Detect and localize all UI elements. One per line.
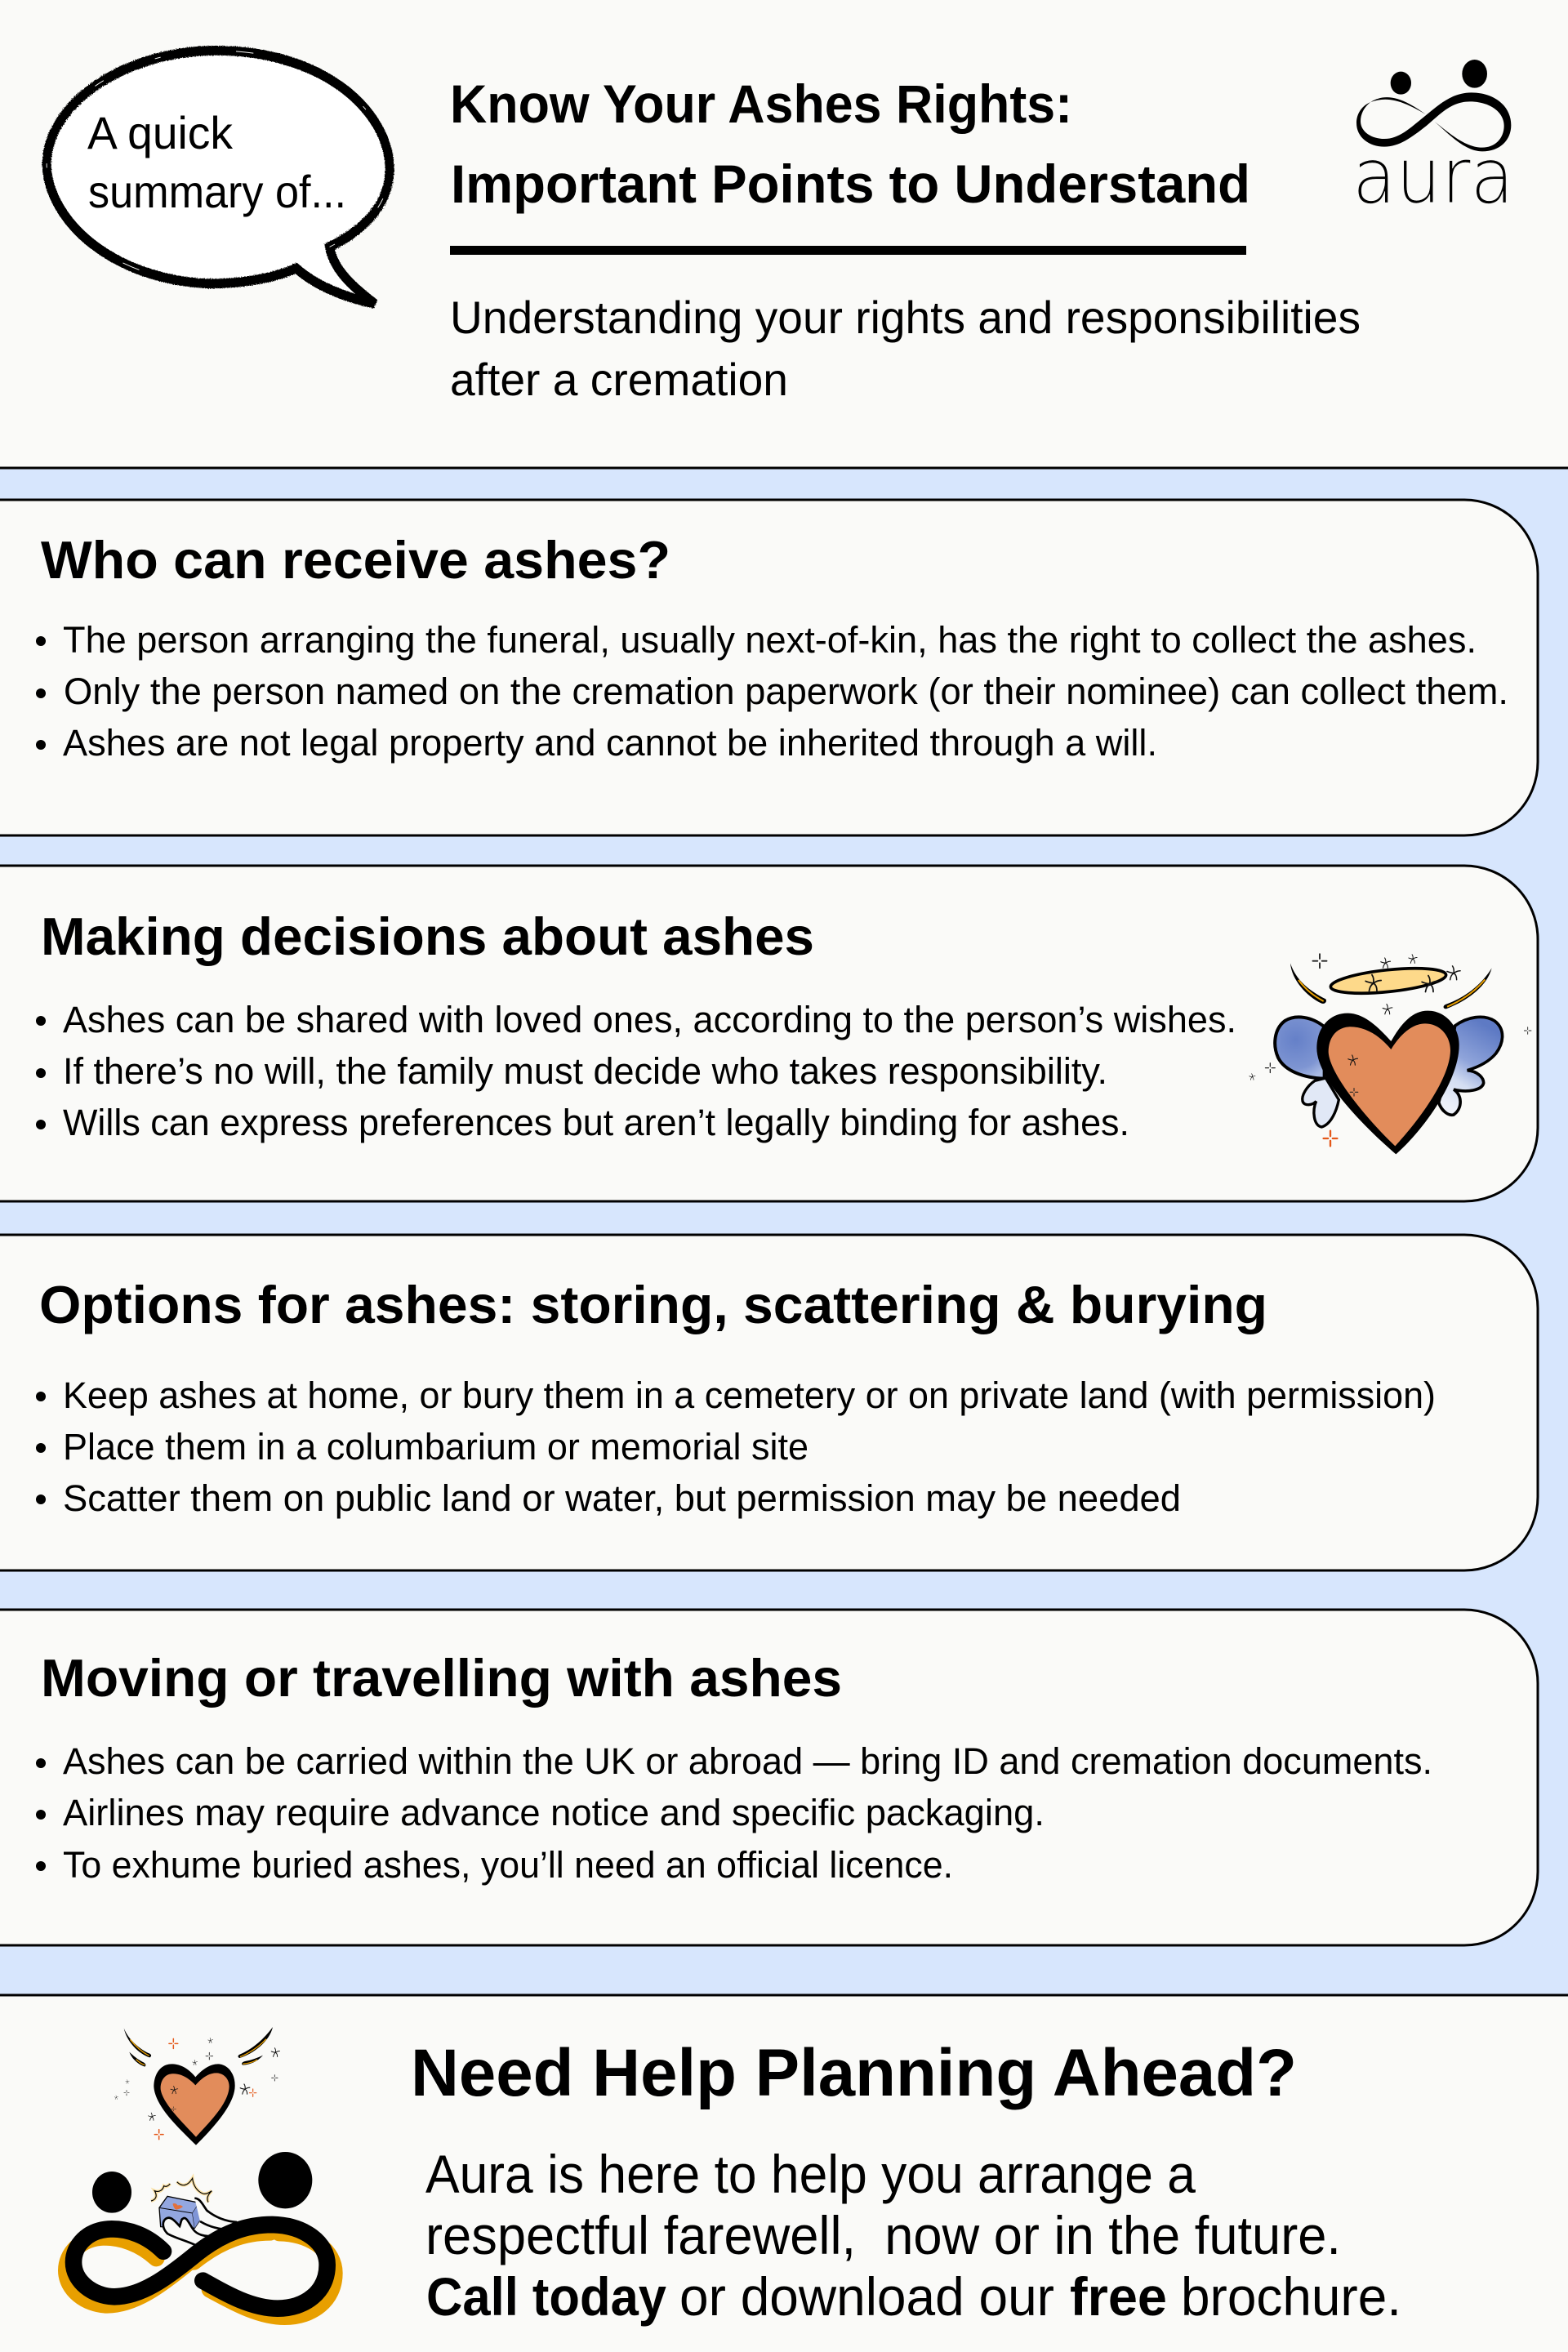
bullet list: Ashes can be carried within the UK or abroad — bring ID and cremation documents. (63, 1740, 1432, 1782)
infinity gold shadow (66, 2232, 334, 2317)
bullet list (36, 1374, 1436, 1519)
bullet list (36, 1740, 1432, 1886)
bullet list: Ashes can be shared with loved ones, according to the person’s wishes. (63, 999, 1236, 1040)
title: Important Points to Understand (451, 154, 1250, 214)
heading: Making decisions about ashes (41, 906, 814, 966)
icon: people with infinity, box and heart (66, 2027, 334, 2317)
bubble text: A quick (87, 107, 234, 158)
infinity black (74, 2225, 327, 2309)
panel: who can receive ashes (0, 500, 1538, 835)
closing text: free (1070, 2266, 1167, 2327)
bubble outline (47, 51, 390, 304)
bullet list: To exhume buried ashes, you’ll need an official licence. (63, 1844, 953, 1886)
bullet list: If there’s no will, the family must decide who takes responsibility. (63, 1050, 1107, 1092)
bullet list: Scatter them on public land or water, but permission may be needed (63, 1477, 1181, 1519)
box and hands (151, 2178, 237, 2245)
bullet list: Only the person named on the cremation paperwork (or their nominee) can collect them. (64, 670, 1508, 712)
subtitle: after a cremation (450, 354, 788, 405)
bullet list: The person arranging the funeral, usually next-of-kin, has the right to collect the ashes. (63, 619, 1477, 661)
icon: aura logo: aura (1352, 132, 1514, 221)
bullet list: Ashes are not legal property and cannot be inherited through a will. (63, 722, 1157, 764)
panel: moving or travelling with ashes (0, 1610, 1538, 1945)
heading: Moving or travelling with ashes (41, 1648, 842, 1708)
title (450, 74, 1250, 214)
panel: making decisions about ashes (0, 866, 1538, 1201)
heads (92, 2172, 131, 2213)
bullet list (36, 619, 1508, 764)
icon: winged heart (1250, 954, 1531, 1154)
panel: options for ashes (0, 1235, 1538, 1570)
bullet list: Wills can express preferences but aren’t legally binding for ashes. (63, 1102, 1129, 1143)
closing text: or download our (679, 2266, 1054, 2327)
title underline (450, 246, 1246, 255)
subtitle: Understanding your rights and responsibilities (450, 292, 1361, 343)
blue content band (0, 467, 1568, 1996)
bullet list: Keep ashes at home, or bury them in a cemetery or on private land (with permission) (63, 1374, 1436, 1416)
heart (154, 2064, 235, 2145)
closing text: Call today (426, 2266, 666, 2327)
header speech bubble (47, 51, 390, 304)
bubble text: summary of... (88, 166, 346, 217)
heart arcs and sparkles (114, 2027, 279, 2140)
bullet list (36, 999, 1236, 1143)
icon: aura logo (1352, 60, 1514, 221)
heading: Options for ashes: storing, scattering & burying (39, 1275, 1267, 1334)
closing text: brochure. (1181, 2266, 1401, 2327)
closing text: Aura is here to help you arrange a (425, 2144, 1196, 2204)
bubble text (87, 107, 346, 217)
subtitle (450, 292, 1361, 405)
heading: Who can receive ashes? (41, 530, 670, 590)
closing heading: Need Help Planning Ahead? (411, 2036, 1297, 2110)
bullet list: Place them in a columbarium or memorial site (63, 1426, 808, 1468)
closing text (425, 2144, 1401, 2327)
title: Know Your Ashes Rights: (450, 74, 1072, 134)
closing text: respectful farewell, now or in the future. (425, 2205, 1341, 2265)
bullet list: Airlines may require advance notice and specific packaging. (63, 1792, 1045, 1833)
